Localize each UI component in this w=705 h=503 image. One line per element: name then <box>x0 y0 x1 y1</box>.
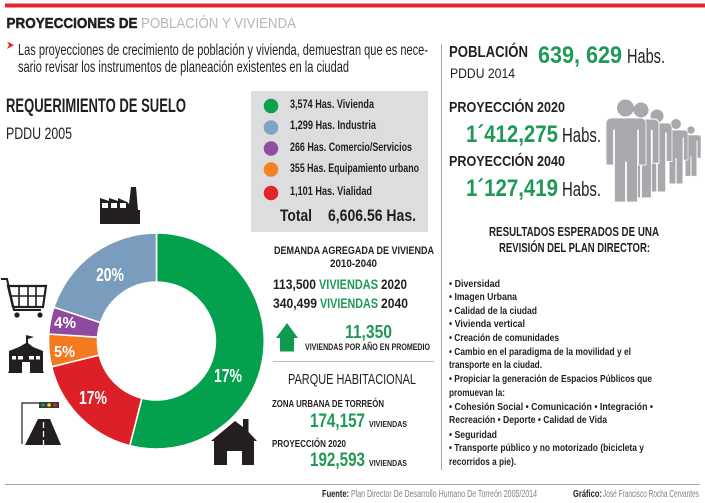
text: list of expected results: • Cohesión Social • Comunicación • Integración • <box>449 401 653 413</box>
icon: house <box>211 419 257 465</box>
title <box>6 15 296 32</box>
heading: resultados esperados <box>489 224 659 255</box>
text: list of expected results: • Imagen Urbana <box>449 291 517 303</box>
heading: resultados esperados: REVISIÓN DEL PLAN DIRECTOR: <box>499 240 650 255</box>
source credit <box>322 489 537 500</box>
panel: legend <box>251 91 428 232</box>
text: demanda agregada de vivienda: 113,500 <box>273 277 316 292</box>
text: viviendas por año: 11,350 <box>345 322 392 342</box>
panel: legend: 266 Has. Comercio/Servicios <box>290 140 412 154</box>
icon: shopping cart <box>1 279 46 318</box>
text: demanda agregada de vivienda: 2010-2040 <box>330 258 377 270</box>
source credit: Fuente: <box>322 489 349 500</box>
text: parque habitacional: ZONA URBANA DE TORREÓN <box>272 397 384 410</box>
text: demanda agregada de vivienda: 2040 <box>381 296 408 311</box>
panel: legend: 355 Has. Equipamiento urbano <box>290 161 419 175</box>
text: parque habitacional <box>272 371 416 471</box>
text: demanda agregada de vivienda: 2020 <box>381 277 407 292</box>
text: list of expected results: • Calidad de la ciudad <box>449 305 537 317</box>
text: proyección 2020: PROYECCIÓN 2020 <box>449 98 565 116</box>
text: proyección 2040: Habs. <box>562 179 601 201</box>
text: list of expected results <box>449 278 653 468</box>
text: población: POBLACIÓN <box>449 42 528 61</box>
donut chart: 17% <box>214 365 242 386</box>
text: parque habitacional: VIVIENDAS <box>369 419 407 429</box>
text: list of expected results: recorridos a pie). <box>449 456 516 468</box>
panel: legend: 3,574 Has. Vivienda <box>290 97 374 111</box>
text: parque habitacional: PROYECCIÓN 2020 <box>272 437 346 450</box>
icon: factory <box>100 187 140 224</box>
graphic credit: Gráfico: <box>573 489 602 500</box>
text: list of expected results: transporte en la ciudad. <box>449 359 542 371</box>
text: viviendas por año <box>305 322 430 352</box>
text: proyección 2040: 1´127,419 <box>466 175 558 202</box>
text: población: Habs. <box>627 46 665 68</box>
donut chart: 20% <box>96 264 124 285</box>
text: viviendas por año: VIVIENDAS POR AÑO EN PROMEDIO <box>305 342 430 352</box>
text: list of expected results: • Cambio en el paradigma de la movilidad y el <box>449 346 631 358</box>
text: demanda agregada de vivienda: 340,499 <box>273 296 317 311</box>
panel: legend: Total <box>280 206 312 225</box>
text: demanda agregada de vivienda <box>273 245 434 311</box>
panel: legend: 6,606.56 Has. <box>328 206 416 225</box>
text: demanda agregada de vivienda: VIVIENDAS <box>319 277 378 292</box>
icon: green up arrow <box>276 323 298 352</box>
text: demanda agregada de vivienda: DEMANDA AGREGADA DE VIVIENDA <box>274 245 434 257</box>
icon: row of people <box>606 100 701 202</box>
text: list of expected results: • Transporte público y no motorizado (bicicleta y <box>449 442 644 454</box>
text: list of expected results: • Vivienda vertical <box>449 318 525 330</box>
text: parque habitacional: 174,157 <box>310 411 365 432</box>
text: list of expected results: promuevan la: <box>449 387 505 399</box>
panel: legend: 1,101 Has. Vialidad <box>290 184 372 198</box>
text: list of expected results: Recreación • Deporte • Calidad de Vida <box>449 414 607 426</box>
text: proyección 2020: 1´412,275 <box>466 121 558 148</box>
title: PROYECCIONES DE <box>6 15 138 32</box>
text: proyección 2040 <box>449 152 601 202</box>
donut chart: 5% <box>54 344 75 361</box>
intro text with red arrow: sario revisar los instrumentos de planeación existentes en la ciudad <box>18 59 349 76</box>
text: parque habitacional: PARQUE HABITACIONAL <box>288 371 416 388</box>
intro text with red arrow: Las proyecciones de crecimiento de población y vivienda, demuestran que es nece- <box>18 42 428 59</box>
text: proyección 2020 <box>449 98 601 148</box>
title: POBLACIÓN Y VIVIENDA <box>141 15 296 32</box>
intro text with red arrow <box>7 42 428 76</box>
text: list of expected results: • Diversidad <box>449 278 500 290</box>
donut chart: 4% <box>54 315 76 332</box>
text: list of expected results: • Creación de comunidades <box>449 332 559 344</box>
source credit: Plan Director De Desarrollo Humano De Torreón 2005/2014 <box>351 489 537 500</box>
top red bar <box>5 4 705 8</box>
text: parque habitacional: VIVIENDAS <box>369 458 407 468</box>
icon: road and traffic light <box>22 402 61 445</box>
text: list of expected results: • Seguridad <box>449 429 497 441</box>
text: parque habitacional: 192,593 <box>310 450 365 471</box>
text: población <box>449 42 665 81</box>
text: proyección 2040: PROYECCIÓN 2040 <box>449 152 565 170</box>
donut chart <box>48 233 264 449</box>
heading: requerimiento de suelo: PDDU 2005 <box>6 124 72 143</box>
panel: legend: 1,299 Has. Industria <box>290 118 376 132</box>
icon: school <box>8 335 44 373</box>
text: demanda agregada de vivienda: VIVIENDAS <box>320 296 378 311</box>
donut chart: 17% <box>79 387 107 408</box>
heading: requerimiento de suelo: REQUERIMIENTO DE SUELO <box>6 96 186 117</box>
heading: requerimiento de suelo <box>6 96 186 143</box>
text: población: 639, 629 <box>538 42 622 69</box>
text: proyección 2020: Habs. <box>562 125 601 147</box>
text: población: PDDU 2014 <box>450 65 515 81</box>
text: list of expected results: • Propiciar la generación de Espacios Públicos que <box>449 373 652 385</box>
